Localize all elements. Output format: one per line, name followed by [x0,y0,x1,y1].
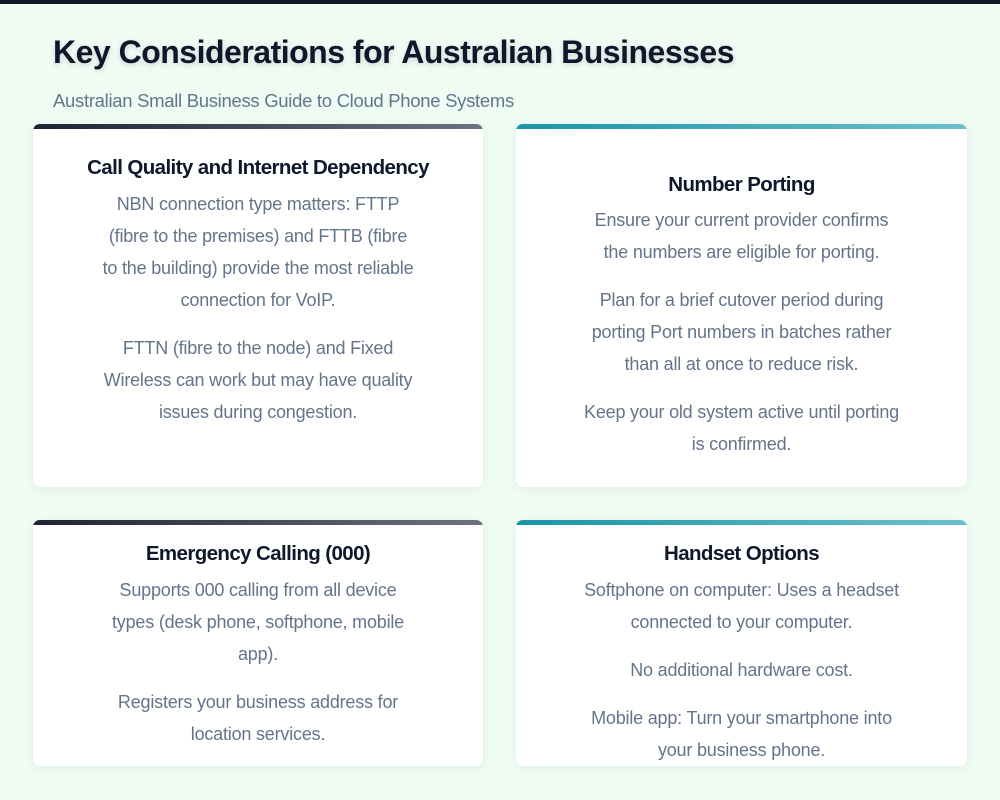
heading: call quality: Call Quality and Internet Dependency [87,156,429,179]
text: call quality body: Wireless can work but may have quality [104,370,412,390]
text: handset body: Mobile app: Turn your smartphone into [591,708,892,728]
text: emergency body: Supports 000 calling from all device [120,580,396,600]
panel: emergency calling [33,520,483,766]
text: call quality body: connection for VoIP. [181,290,335,310]
text: handset body [584,580,899,760]
text: call quality body: issues during congestion. [159,402,357,422]
text: emergency body: location services. [191,724,325,744]
text: number porting body: than all at once to reduce risk. [625,354,858,374]
text: number porting body: porting Port numbers in batches rather [592,322,891,342]
panel: number porting [516,124,967,487]
text: number porting body: is confirmed. [692,434,791,454]
text: number porting body: Plan for a brief cutover period during [600,290,883,310]
text: number porting body: Ensure your current provider confirms [595,210,888,230]
text: call quality body [102,194,413,422]
heading: emergency calling: Emergency Calling (000) [146,542,370,565]
text: number porting body [584,210,899,454]
text: emergency body: app). [238,644,278,664]
title: Key Considerations for Australian Businesses [53,34,734,70]
text: call quality body: to the building) provide the most reliable [103,258,413,278]
heading: handset options: Handset Options [664,542,819,565]
panel: call quality [33,124,483,487]
text: emergency body [112,580,404,744]
text: handset body: Softphone on computer: Uses a headset [584,580,899,600]
subtitle: Australian Small Business Guide to Cloud Phone Systems [53,90,514,111]
text: call quality body: (fibre to the premises) and FTTB (fibre [109,226,407,246]
panel: handset options [516,520,967,766]
text: emergency body: Registers your business address for [118,692,398,712]
text: number porting body: the numbers are eligible for porting. [604,242,879,262]
text: number porting body: Keep your old system active until porting [584,402,899,422]
text: handset body: No additional hardware cost. [630,660,853,680]
heading: number porting: Number Porting [668,173,815,196]
text: handset body: your business phone. [658,740,825,760]
text: call quality body: FTTN (fibre to the node) and Fixed [123,338,393,358]
text: handset body: connected to your computer. [631,612,852,632]
text: emergency body: types (desk phone, softphone, mobile [112,612,404,632]
text: call quality body: NBN connection type matters: FTTP [117,194,399,214]
